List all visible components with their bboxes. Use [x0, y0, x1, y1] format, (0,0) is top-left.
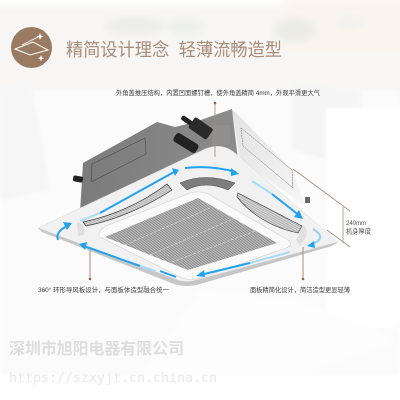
panel rim shadow [38, 228, 338, 286]
corner hubs [77, 222, 84, 236]
watermark: company name: 深圳市旭阳电器有限公司 [9, 339, 184, 358]
blue airflow arrows [57, 167, 320, 277]
thickness label [346, 220, 372, 236]
unit body: right face [232, 109, 305, 206]
grille highlight lines [125, 208, 258, 262]
unit body: left face [80, 109, 238, 212]
bottom left caption: 360° 环形导风板设计，与面板体造型融合统一 [38, 285, 170, 294]
title: 精简设计理念 轻薄流畅造型 [66, 39, 282, 60]
inner rounded frame [99, 192, 291, 280]
left vent [83, 184, 172, 226]
leader line: bottom right [302, 247, 304, 280]
leader line: bottom left [89, 250, 91, 280]
thickness dimension lines [293, 169, 350, 247]
right vent [237, 193, 302, 233]
top vent [180, 178, 235, 190]
unit body: rivet panel outline [91, 138, 146, 182]
thickness label: 机身厚度 [346, 226, 372, 236]
thickness label: 240mm [346, 220, 366, 227]
unit body: right face vent [241, 128, 293, 188]
ceiling panel [38, 146, 338, 282]
icon: ceiling panel badge [11, 27, 52, 68]
bottom right caption: 面板精简化设计，简洁造型更显轻薄 [250, 285, 350, 294]
air conditioner unit [38, 109, 338, 286]
leader line: top [214, 102, 216, 157]
air return grille [105, 198, 277, 270]
top feature caption: 外角盖推压结构，内置凹面螺钉槽，使外角盖精简 4mm，外观平滑更大气 [116, 88, 321, 97]
watermark: url: https://szxyjt.cn.china.cn [9, 371, 217, 386]
pipe connectors [73, 115, 310, 203]
